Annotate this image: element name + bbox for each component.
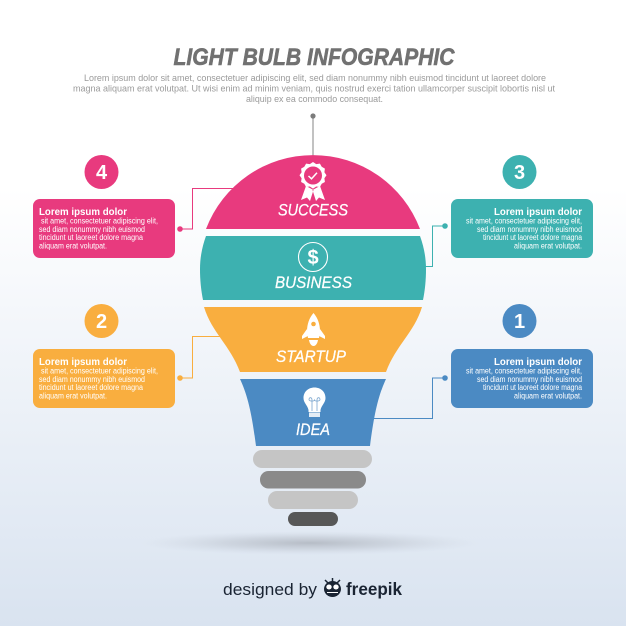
card 2: tincidunt ut laoreet dolore magna — [39, 383, 143, 392]
connector: startup — [178, 336, 220, 380]
bulb shadow — [140, 531, 480, 555]
icon: dollar coin — [298, 242, 328, 272]
card 1: Lorem ipsum dolor — [494, 356, 582, 368]
card 3: aliquam erat volutpat. — [514, 242, 582, 250]
card 2: Lorem ipsum dolor — [39, 356, 127, 368]
card 3: sit amet, consectetuer adipiscing elit, — [466, 216, 582, 226]
bulb segment: success — [206, 155, 420, 229]
panel: step 2 — [33, 304, 175, 408]
icon: rocket — [302, 313, 325, 346]
card 1: aliquam erat volutpat. — [514, 392, 582, 400]
number badge 2 — [84, 304, 118, 338]
card 4: Lorem ipsum dolor — [39, 206, 127, 218]
footer credit: designed by — [223, 580, 318, 599]
connector: business — [424, 224, 447, 266]
panel: step 3 — [451, 155, 593, 258]
panel: step 1 — [451, 304, 593, 408]
card 2 — [33, 349, 175, 408]
card 3: sed diam nonummy nibh euismod — [477, 225, 582, 234]
intro text: magna aliquam erat volutpat. Ut wisi enim ad minim veniam, quis nostrud exerci tation ullamcorper suscipit lobortis nisl ut — [73, 82, 555, 94]
icon: ribbon badge — [299, 162, 327, 201]
card 4: tincidunt ut laoreet dolore magna — [39, 233, 143, 242]
icon: dollar coin: $ — [307, 247, 319, 269]
panel: step 4 — [33, 155, 175, 258]
intro text: Lorem ipsum dolor sit amet, consectetuer adipiscing elit, sed diam nonummy nibh euismod tincidunt ut laoreet dolore — [84, 72, 546, 83]
intro text: aliquip ex ea commodo consequat. — [246, 93, 383, 104]
card 4 — [33, 199, 175, 258]
card 2: sit amet, consectetuer adipiscing elit, — [41, 366, 158, 376]
label: idea: IDEA — [296, 420, 330, 439]
number badge 2: 2 — [96, 311, 107, 333]
card 1: sed diam nonummy nibh euismod — [477, 375, 582, 384]
number badge 3: 3 — [514, 162, 525, 184]
card 4: sit amet, consectetuer adipiscing elit, — [41, 216, 158, 226]
bulb segment: business — [200, 236, 426, 300]
label: startup: STARTUP — [276, 347, 347, 366]
card 3: tincidunt ut laoreet dolore magna — [483, 233, 582, 242]
card 3 — [451, 199, 593, 258]
label: success: SUCCESS — [278, 200, 349, 220]
intro text — [73, 72, 555, 104]
card 2: sed diam nonummy nibh euismod — [39, 375, 145, 384]
bulb base — [253, 450, 372, 526]
footer credit: freepik — [346, 579, 402, 599]
footer credit — [223, 578, 402, 599]
card 4: sed diam nonummy nibh euismod — [39, 225, 145, 234]
number badge 3 — [502, 155, 536, 189]
connector: success — [178, 188, 234, 231]
connector: idea — [372, 376, 447, 418]
card 1: tincidunt ut laoreet dolore magna — [483, 383, 582, 392]
card 3: Lorem ipsum dolor — [494, 206, 582, 218]
number badge 1: 1 — [514, 311, 525, 333]
bulb segment: idea — [240, 379, 386, 446]
card 1: sit amet, consectetuer adipiscing elit, — [466, 366, 582, 376]
card 1 — [451, 349, 593, 408]
card 2: aliquam erat volutpat. — [39, 392, 107, 400]
top stem connector — [310, 113, 316, 156]
number badge 4: 4 — [96, 162, 108, 184]
icon: light bulb — [304, 388, 326, 417]
title: LIGHT BULB INFOGRAPHIC — [174, 44, 455, 71]
icon: freepik logo — [324, 578, 341, 597]
bulb segment: startup — [204, 307, 422, 372]
number badge 4 — [84, 155, 118, 189]
label: business: BUSINESS — [275, 273, 353, 292]
card 4: aliquam erat volutpat. — [39, 242, 107, 250]
number badge 1 — [502, 304, 536, 338]
